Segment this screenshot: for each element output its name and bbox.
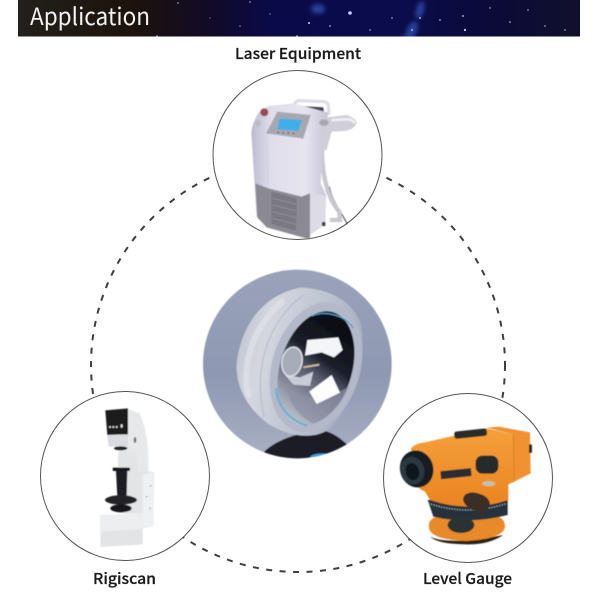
mirror highlights	[305, 337, 343, 357]
dashed connector ring	[91, 158, 505, 572]
machine body	[251, 103, 328, 235]
header banner	[18, 0, 580, 40]
icon: hardness tester	[100, 408, 154, 547]
control panel	[266, 112, 311, 139]
levelling screw	[448, 517, 474, 533]
tilt lever	[463, 492, 490, 517]
label: laser equipment: Laser Equipment	[235, 43, 361, 64]
icon: level instrument	[396, 427, 532, 544]
scale ring	[428, 500, 508, 520]
reflector shadow	[264, 430, 347, 460]
front face ring	[270, 303, 363, 430]
base	[100, 513, 143, 547]
panel: rigiscan	[40, 392, 210, 560]
main body	[411, 428, 514, 507]
panel: level gauge	[384, 394, 552, 562]
laser handpiece	[317, 115, 357, 151]
tripod base	[430, 535, 503, 544]
icon: laser machine	[251, 101, 357, 239]
lens housing rim	[237, 288, 362, 436]
central lens disc	[203, 270, 392, 463]
label: rigiscan: Rigiscan	[93, 568, 156, 589]
emergency knob	[260, 108, 268, 116]
mirror bowl	[277, 310, 355, 424]
label: level gauge: Level Gauge	[423, 568, 512, 589]
focus knob	[476, 456, 498, 474]
lower grille	[255, 183, 310, 239]
digital head	[105, 408, 128, 435]
eyepiece	[396, 447, 438, 491]
test column	[113, 468, 130, 471]
panel: laser equipment	[213, 70, 382, 240]
